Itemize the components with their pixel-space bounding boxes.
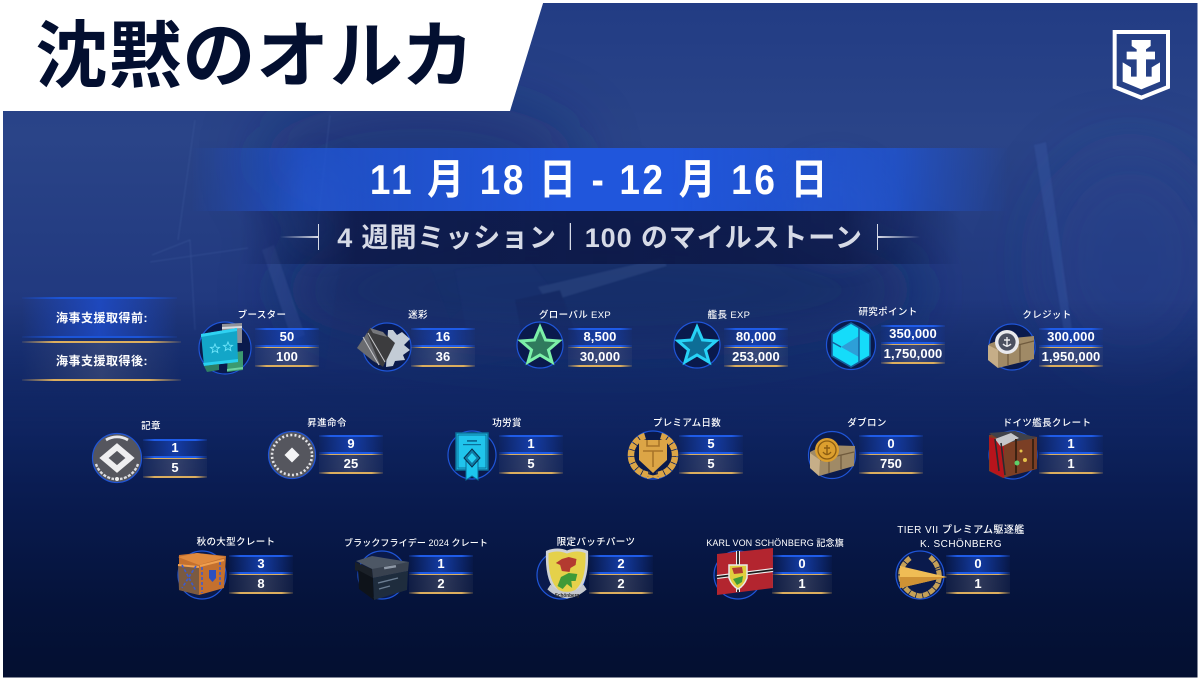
- reward: doubloons: [808, 417, 923, 480]
- bracket: right: [877, 224, 920, 250]
- icon: flag: [708, 545, 768, 605]
- reward: camouflage: 迷彩: [408, 310, 428, 321]
- stats: booster: 100: [276, 349, 298, 364]
- stats: credits: 1,950,000: [1042, 349, 1100, 364]
- reward: autumn large crate: [172, 533, 293, 609]
- stats: insignia: 1: [171, 440, 179, 455]
- reward: booster: ブースター: [238, 310, 286, 321]
- panel: subtitle band: [240, 211, 960, 264]
- stats: promotion orders: 9: [347, 436, 355, 451]
- stats: captain EXP: 80,000: [736, 329, 776, 344]
- icon: Black Friday crate: [352, 545, 412, 605]
- stats: Black Friday crate: 1: [437, 556, 445, 571]
- legend text: before: 海事支援取得前:: [56, 311, 148, 325]
- panel: title banner: [3, 3, 544, 111]
- reward: captain EXP: [673, 310, 788, 369]
- icon: booster flags: [198, 321, 252, 375]
- reward: credits: [988, 310, 1103, 371]
- stats: patch parts: 2: [617, 556, 625, 571]
- stats: autumn crate: 3: [257, 556, 265, 571]
- stats: research points: [881, 325, 945, 364]
- reward: merit award: 功労賞: [492, 418, 522, 429]
- stats: German crate: 1: [1067, 456, 1075, 471]
- reward: German commander crate: [988, 418, 1103, 480]
- stats: doubloons: [859, 435, 923, 474]
- stats: premium days: 5: [707, 456, 715, 471]
- icon: doubloon crate: [808, 430, 856, 480]
- stats: promotion orders: [319, 435, 383, 474]
- icon: promotion orders: [268, 430, 316, 480]
- stats: camouflage: 16: [436, 329, 450, 344]
- stats: doubloons: 750: [880, 456, 902, 471]
- stats: global EXP: 8,500: [583, 329, 617, 344]
- heading: dates: 11 月 18 日 - 12 月 16 日: [370, 156, 830, 203]
- icon: blue star: [673, 321, 721, 369]
- reward: premium days: プレミアム日数: [653, 418, 721, 429]
- stats: insignia: 5: [171, 460, 179, 475]
- reward: insignia: 記章: [141, 421, 161, 432]
- stats: premium days: 5: [707, 436, 715, 451]
- reward: captain EXP: 艦長 EXP: [708, 310, 750, 321]
- reward: booster: [198, 309, 319, 375]
- bracket: left: [280, 224, 319, 250]
- subtitle with bracket lines: [282, 223, 918, 253]
- reward: research points: [826, 306, 945, 370]
- icon: merit certificate: [447, 430, 497, 481]
- stats: destroyer: 1: [974, 576, 982, 591]
- stats: captain EXP: 253,000: [732, 349, 780, 364]
- stats: flag: 1: [798, 576, 806, 591]
- stats: flag: 0: [798, 556, 806, 571]
- stats: research points: 1,750,000: [884, 346, 942, 361]
- stats: Black Friday crate: 2: [437, 576, 445, 591]
- stats: merit award: 5: [527, 456, 535, 471]
- stats: patch parts: [589, 555, 653, 594]
- stats: autumn crate: [229, 555, 293, 594]
- reward: German commander crate: ドイツ艦長クレート: [1003, 418, 1091, 429]
- reward: limited patch parts: 限定パッチパーツ: [557, 537, 635, 548]
- stats: credits: 300,000: [1047, 329, 1095, 344]
- reward: Black Friday 2024 crate: [352, 533, 473, 609]
- stats: German crate: [1039, 435, 1103, 474]
- icon: anchor shield logo: [1112, 30, 1170, 100]
- stats: destroyer: [946, 555, 1010, 594]
- icon: green star: [516, 321, 564, 369]
- reward: doubloons: ダブロン: [847, 418, 887, 429]
- legend text: after: 海事支援取得後:: [56, 354, 148, 368]
- stats: doubloons: 0: [887, 436, 895, 451]
- stats: patch parts: 2: [617, 576, 625, 591]
- stats: booster: 50: [280, 329, 294, 344]
- reward: Tier VII premium destroyer K. Schönberg: [890, 533, 1010, 609]
- reward: autumn large crate: 秋の大型クレート: [197, 537, 275, 548]
- reward: Karl von Schönberg commemorative flag: [708, 533, 832, 609]
- reward: promotion orders: 昇進命令: [307, 418, 347, 429]
- reward: merit award: [447, 418, 563, 481]
- stats: booster: [255, 328, 319, 367]
- label: tier VII destroyer: TIER VII プレミアム駆逐艦: [897, 525, 1025, 536]
- stats: German crate: 1: [1067, 436, 1075, 451]
- label: tier VII destroyer: [897, 524, 1025, 552]
- reward: premium days: [628, 418, 743, 480]
- icon: research hexagon: [826, 320, 876, 370]
- stats: autumn crate: 8: [257, 576, 265, 591]
- reward: global EXP: グローバル EXP: [539, 310, 611, 321]
- reward: Black Friday 2024 crate: ブラックフライデー 2024 クレート: [344, 538, 488, 548]
- icon: patch shield: [532, 545, 592, 605]
- reward: promotion orders: [268, 418, 383, 480]
- reward: credits: クレジット: [1022, 310, 1072, 321]
- icon: autumn crate: [172, 545, 232, 605]
- stats: credits: [1039, 328, 1103, 367]
- stats: promotion orders: 25: [344, 456, 358, 471]
- title: 沈黙のオルカ: [35, 16, 475, 97]
- panel: date band: [190, 148, 1010, 211]
- icon: camouflage: [357, 322, 412, 372]
- stats: premium days: [679, 435, 743, 474]
- reward: limited patch parts: [532, 533, 653, 609]
- stats: camouflage: [411, 328, 475, 367]
- icon: credits crate: [988, 323, 1036, 371]
- stats: global EXP: [568, 328, 632, 367]
- label: tier VII destroyer: K. SCHÖNBERG: [920, 539, 1002, 550]
- reward: global EXP: [516, 310, 632, 369]
- reward: camouflage: [357, 310, 475, 372]
- legend: before and after: [22, 297, 181, 381]
- stats: merit award: 1: [527, 436, 535, 451]
- stats: global EXP: 30,000: [580, 349, 620, 364]
- stats: flag: [772, 555, 832, 594]
- stats: insignia: [143, 439, 207, 478]
- stats: destroyer: 0: [974, 556, 982, 571]
- reward: insignia: [92, 420, 207, 484]
- subtitle text: 4 週間ミッション｜100 のマイルストーン: [337, 223, 863, 253]
- reward: research points: 研究ポイント: [858, 307, 918, 318]
- stats: captain EXP: [724, 328, 788, 367]
- icon: patch shield: Schönberg: [555, 593, 579, 599]
- stats: camouflage: 36: [436, 349, 450, 364]
- stats: Black Friday crate: [409, 555, 473, 594]
- stats: research points: 350,000: [889, 326, 937, 341]
- icon: premium laurel: [628, 430, 678, 480]
- icon: German crate: [988, 430, 1038, 480]
- stats: merit award: [499, 435, 563, 474]
- reward: Karl von Schönberg commemorative flag: KARL VON SCHÖNBERG 記念旗: [706, 538, 844, 548]
- icon: insignia: [92, 432, 142, 484]
- icon: destroyer laurel pennant: [890, 545, 950, 605]
